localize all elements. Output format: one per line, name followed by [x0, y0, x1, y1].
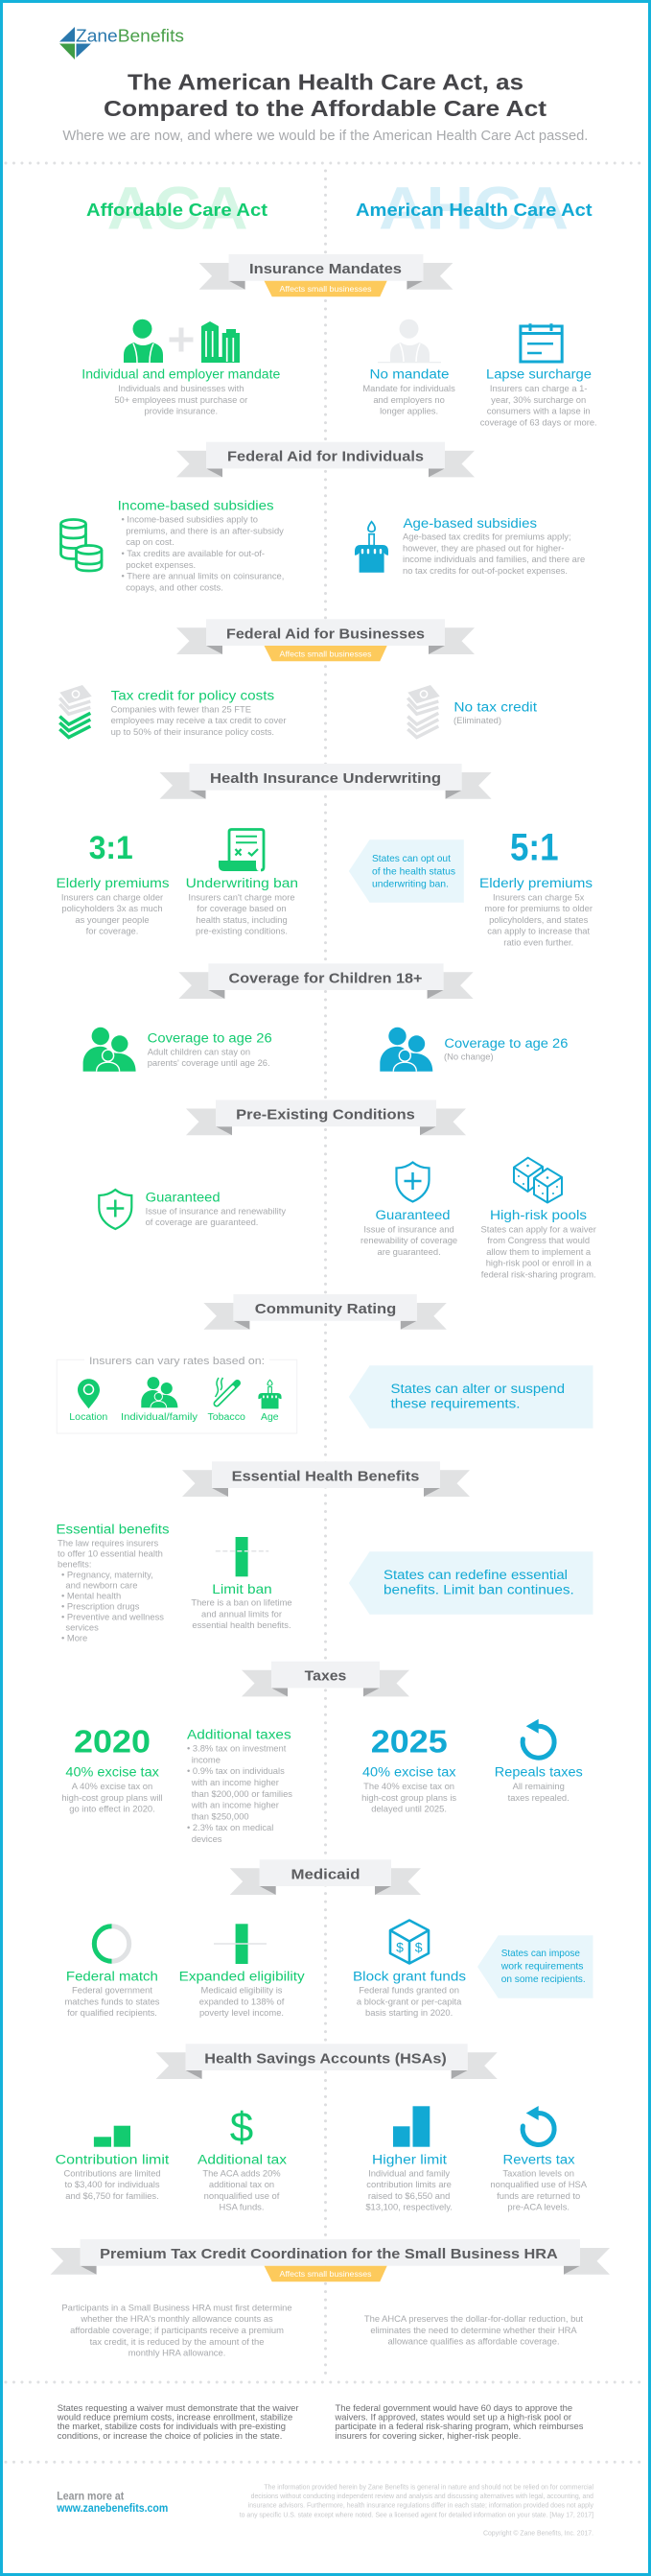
text: health status, including [196, 914, 288, 925]
text: States can apply for a waiver [481, 1223, 596, 1234]
panel: rate factors [57, 1355, 297, 1433]
disclaimer: to any specific U.S. state except where noted. See a licensed agent for detailed information on your state. [May 17, 2017] [240, 2512, 593, 2518]
title [104, 69, 546, 121]
text: than $200,000 or families [192, 1788, 292, 1799]
icon: buildings [201, 321, 240, 363]
heading: Limit ban [212, 1582, 272, 1596]
icon: small bars [94, 2126, 130, 2147]
heading: Underwriting ban [186, 876, 298, 890]
icon: shield [99, 1190, 131, 1229]
panel: essential benefits [56, 1522, 170, 1643]
heading: Expanded eligibility [179, 1969, 305, 1983]
panel: repeals taxes [495, 1719, 583, 1803]
heading: Elderly premiums [479, 876, 593, 890]
text: employees may receive a tax credit to cover [111, 715, 286, 725]
banner: Insurance Mandates: Affects small businesses [280, 284, 372, 294]
text: nonqualified use of [204, 2190, 280, 2201]
callout: work requirements: work requirements [500, 1961, 583, 1973]
icon: bar [214, 1924, 267, 1964]
text: Individual and family [368, 2167, 450, 2178]
icon: plus [169, 328, 194, 351]
big number: 3:1 [89, 830, 133, 866]
panel: ACA excise tax [61, 1725, 163, 1814]
text: pre-existing conditions. [196, 926, 288, 936]
text: waiver approval: insurers for covering sicker, higher-risk people. [336, 2430, 521, 2441]
heading: 40% excise tax [362, 1765, 456, 1780]
column header: Affordable Care Act: ACA [107, 176, 248, 243]
text: (No change) [444, 1051, 494, 1061]
text: ACA HRA: tax credit, it is reduced by the amount of the [90, 2336, 264, 2347]
icon: coins [61, 520, 102, 571]
panel: limit ban [191, 1537, 292, 1630]
callout: alter or suspend [349, 1365, 593, 1429]
text: • 3.8% tax on investment [187, 1743, 287, 1754]
heading: Tax credit for policy costs [111, 688, 274, 702]
text: services [65, 1622, 99, 1633]
text: Individuals and businesses with [118, 383, 244, 393]
text: The law requires insurers [58, 1537, 159, 1548]
text: allow them to implement a [486, 1246, 592, 1257]
icon: family [83, 1028, 136, 1072]
icon: tall bars [393, 2106, 430, 2147]
icon: money stack [59, 685, 92, 737]
text: Mandate for individuals [362, 383, 455, 393]
heading: Coverage to age 26 [148, 1031, 272, 1046]
text: • Tax credits are available for out-of- [121, 548, 265, 558]
text: waiver requirements: the market, stabilize costs for individuals with pre-existing [58, 2421, 286, 2431]
logo: ZaneBenefits [76, 27, 184, 46]
panel: expanded eligibility [179, 1924, 305, 2018]
label: Location [69, 1412, 107, 1423]
text: coverage of 63 days or more. [480, 416, 597, 427]
banner: Coverage for Children 18+ [178, 963, 474, 999]
column header: Affordable Care Act: Affordable Care Act [86, 200, 267, 220]
text: to $3,400 for individuals [64, 2179, 160, 2189]
text: delayed until 2025. [371, 1804, 447, 1814]
text: funds are returned to [497, 2190, 580, 2201]
banner: Premium Tax Credit Coordination: Affects small businesses [280, 2269, 372, 2279]
heading: Guaranteed [376, 1208, 451, 1222]
panel: AHCA no mandate [362, 319, 455, 416]
footer link: www.zanebenefits.com [56, 2503, 168, 2515]
logo [59, 27, 184, 59]
text: waiver approval: The federal government would have 60 days to approve the [336, 2402, 572, 2413]
text: contribution limits are [366, 2179, 452, 2189]
heading: Additional tax [198, 2152, 287, 2166]
panel: tax credit for policy costs [59, 685, 286, 737]
text: • 0.9% tax on individuals [187, 1765, 285, 1776]
text: Medicaid eligibility is [201, 1985, 283, 1996]
text: copays, and other costs. [126, 581, 223, 592]
banner: Health Insurance Underwriting [159, 764, 492, 799]
callout: opt out: underwriting ban. [372, 879, 449, 890]
text: of coverage are guaranteed. [146, 1217, 258, 1227]
heading: No mandate [370, 366, 449, 381]
panel: ACA coverage to 26 [83, 1028, 272, 1072]
text: (Eliminated) [453, 715, 501, 725]
text: provide insurance. [144, 406, 218, 416]
banner: Premium Tax Credit Coordination [51, 2239, 610, 2281]
banner: Medicaid [230, 1859, 421, 1895]
text: AHCA HRA: allowance qualifies as affordable coverage. [387, 2336, 560, 2347]
banner: Health Insurance Underwriting: Health Insurance Underwriting [210, 770, 441, 787]
banner: Insurance Mandates [199, 254, 453, 296]
text: however, they are phased out for higher- [403, 542, 564, 553]
icon: cake [355, 522, 388, 573]
text: for coverage based on [197, 903, 287, 913]
text: ACA HRA: monthly HRA allowance. [128, 2348, 225, 2358]
heading: Block grant funds [353, 1969, 466, 1983]
text: from Congress that would [487, 1235, 590, 1245]
text: • Preventive and wellness [61, 1612, 164, 1622]
panel: ACA elderly premiums [56, 830, 170, 936]
text: and annual limits for [201, 1608, 282, 1619]
label: Tobacco [207, 1412, 245, 1423]
big number: 2025 [371, 1725, 448, 1761]
text: Contributions are limited [63, 2167, 161, 2178]
banner: Pre-Existing Conditions [186, 1099, 466, 1135]
text: Age-based tax credits for premiums apply; [403, 532, 571, 542]
text: Adult children can stay on [148, 1046, 250, 1056]
text: 50+ employees must purchase or [114, 394, 247, 405]
disclaimer: insurance advisors. Furthermore, health insurance regulations differ in each state; information provided does not apply [248, 2503, 594, 2510]
icon: cake [258, 1380, 282, 1408]
text: are guaranteed. [377, 1246, 441, 1257]
text: ACA HRA: whether the HRA's monthly allowance counts as [80, 2313, 273, 2324]
text: devices [192, 1833, 222, 1844]
heading: Federal match [66, 1969, 158, 1983]
callout: alter or suspend: these requirements. [391, 1397, 520, 1411]
icon: scroll [219, 829, 264, 871]
heading: Guaranteed [146, 1191, 221, 1205]
heading: High-risk pools [490, 1208, 587, 1222]
text: with an income higher [191, 1800, 279, 1810]
icon: money box: $ [415, 1940, 423, 1955]
text: Insurers can't charge more [188, 891, 295, 902]
column header: American Health Care Act: American Health Care Act [356, 200, 593, 220]
text: waiver approval: waivers. If approved, states would set up a high-risk pool or [334, 2412, 571, 2422]
text: essential health benefits. [192, 1619, 291, 1630]
text: AHCA HRA: eliminates the need to determine whether their HRA [370, 2325, 577, 2335]
text: matches funds to states [64, 1996, 160, 2006]
text: and employers no [373, 394, 445, 405]
text: income individuals and families, and there are [403, 554, 585, 564]
heading: Essential benefits [56, 1522, 170, 1536]
callout: redefine benefits [349, 1551, 593, 1615]
text: for coverage. [86, 926, 138, 936]
banner: Coverage for Children 18+: Coverage for Children 18+ [228, 970, 423, 986]
banner: Health Savings Accounts (HSAs): Health Savings Accounts (HSAs) [204, 2050, 447, 2067]
text: nonqualified use of HSA [490, 2179, 588, 2189]
panel: AHCA guaranteed [360, 1163, 457, 1257]
text: ACA HRA: affordable coverage; if participants receive a premium [70, 2325, 284, 2335]
text: • There are annual limits on coinsurance, [121, 571, 284, 581]
heading: Higher limit [372, 2152, 447, 2166]
text: high-cost group plans will [61, 1792, 163, 1803]
icon: shield [397, 1163, 430, 1201]
callout: alter or suspend: States can alter or suspend [391, 1382, 565, 1396]
banner: Taxes [242, 1662, 409, 1696]
text: raised to $6,550 and [368, 2190, 450, 2201]
text: pocket expenses. [126, 559, 196, 570]
heading: Additional taxes [187, 1727, 291, 1741]
icon: bar with limit line [216, 1537, 268, 1576]
text: taxes repealed. [508, 1792, 570, 1803]
text: • Pregnancy, maternity, [61, 1570, 153, 1580]
text: Insurers can charge older [61, 891, 163, 902]
banner: Community Rating [203, 1294, 447, 1330]
panel: AHCA lapse surcharge [480, 323, 597, 427]
banner: Health Savings Accounts (HSAs) [156, 2044, 498, 2079]
text: cap on cost. [126, 536, 174, 547]
text: than $250,000 [192, 1810, 249, 1821]
icon: family [141, 1377, 177, 1407]
heading: No tax credit [453, 700, 537, 715]
title: Compared to the Affordable Care Act [104, 96, 546, 121]
banner: Essential Health Benefits: Essential Health Benefits [232, 1468, 419, 1484]
banner: Federal Aid for Individuals: Federal Aid for Individuals [227, 449, 424, 465]
text: parents' coverage until age 26. [148, 1057, 270, 1068]
text: The ACA adds 20% [202, 2167, 281, 2178]
text: premiums, and there is an after-subsidy [126, 525, 284, 535]
text: • Prescription drugs [61, 1601, 140, 1612]
icon: money box [390, 1921, 429, 1963]
column header: American Health Care Act: AHCA [379, 176, 569, 243]
text: A 40% excise tax on [72, 1781, 152, 1791]
text: high-risk pool or enroll in a [486, 1258, 592, 1268]
text: policyholders, and states [489, 914, 589, 925]
text: The 40% excise tax on [363, 1781, 454, 1791]
heading: Lapse surcharge [486, 366, 592, 381]
icon: gray person [378, 319, 441, 363]
icon: repeat arrow [523, 1719, 554, 1758]
panel: additional tax [198, 2104, 287, 2212]
text: waiver requirements: conditions, or increase the choice of policies in the state. [58, 2430, 282, 2441]
panel: AHCA coverage to 26 [380, 1028, 568, 1072]
text: up to 50% of their insurance policy costs. [111, 726, 274, 737]
panel: AHCA excise tax [361, 1725, 456, 1814]
text: benefits: [58, 1558, 91, 1569]
heading: Contribution limit [56, 2152, 170, 2166]
banner: Medicaid: Medicaid [291, 1866, 360, 1882]
callout: redefine benefits: States can redefine essential [384, 1568, 568, 1582]
panel: no tax credit [407, 685, 537, 737]
text: go into effect in 2020. [69, 1804, 155, 1814]
text: Federal government [72, 1985, 152, 1996]
big number: 5:1 [510, 827, 558, 869]
callout: opt out: States can opt out [372, 853, 451, 864]
text: expanded to 138% of [199, 1996, 285, 2006]
banner: Community Rating: Community Rating [255, 1301, 396, 1317]
icon: dollar: $ [230, 2104, 253, 2151]
icon: donut [94, 1926, 129, 1961]
text: ratio even further. [503, 936, 573, 948]
text: can apply to increase that [487, 926, 591, 936]
panel: additional taxes [187, 1727, 292, 1844]
text: consumers with a lapse in [487, 406, 591, 416]
text: Issue of insurance and renewability [146, 1205, 286, 1216]
label: Age [261, 1412, 279, 1423]
heading: Reverts tax [502, 2152, 575, 2166]
banner: Essential Health Benefits [182, 1461, 470, 1497]
heading: Elderly premiums [56, 876, 170, 890]
text: waiver requirements: would reduce premium costs, increase enrollment, stabilize [57, 2412, 292, 2422]
banner: Taxes: Taxes [305, 1668, 346, 1685]
panel: ACA mandate [81, 319, 280, 416]
heading: Income-based subsidies [118, 499, 274, 513]
banner: Insurance Mandates: Insurance Mandates [249, 261, 402, 277]
text: Companies with fewer than 25 FTE [111, 703, 251, 714]
text: $13,100, respectively. [365, 2202, 453, 2212]
text: poverty level income. [199, 2007, 284, 2018]
callout: opt out: of the health status [372, 865, 455, 877]
panel: federal match [64, 1926, 160, 2018]
banner: Federal Aid for Individuals [176, 442, 475, 477]
text: a block-grant or per-capita [357, 1996, 462, 2006]
text: as younger people [75, 914, 150, 925]
text: income [192, 1754, 221, 1764]
banner: Premium Tax Credit Coordination: Premium Tax Credit Coordination for the Small Business HRA [100, 2246, 558, 2262]
text: and $6,750 for families. [65, 2190, 159, 2201]
heading: Age-based subsidies [403, 516, 537, 531]
footer link [56, 2491, 168, 2515]
disclaimer: Copyright © Zane Benefits, Inc. 2017. [483, 2529, 593, 2537]
text: waiver approval: participate in a federal risk-sharing program, which reimburses [336, 2421, 584, 2431]
title: The American Health Care Act, as [128, 69, 523, 94]
panel: income-based subsidies [61, 499, 284, 592]
text: ACA HRA: Participants in a Small Business HRA must first determine [61, 2302, 292, 2312]
icon: repeat arrow [523, 2106, 554, 2144]
heading: Coverage to age 26 [444, 1036, 568, 1051]
icon: family [380, 1028, 432, 1072]
text: year, 30% surcharge on [491, 394, 586, 405]
panel: higher limit [365, 2106, 453, 2212]
banner: Federal Aid for Businesses: Affects small businesses [280, 649, 372, 658]
panel: high-risk pools [481, 1158, 596, 1280]
text: Insurers can charge 5x [493, 891, 585, 902]
icon: dice [514, 1158, 562, 1203]
text: • Income-based subsidies apply to [121, 514, 258, 525]
text: Taxation levels on [502, 2167, 574, 2178]
panel: ACA guaranteed [99, 1190, 286, 1229]
text: Insurers can charge a 1- [490, 383, 588, 393]
text: There is a ban on lifetime [191, 1597, 292, 1608]
text: additional tax on [209, 2179, 274, 2189]
text: no tax credits for out-of-pocket expenses. [403, 565, 568, 576]
callout: redefine benefits: benefits. Limit ban continues. [384, 1583, 574, 1597]
text: for qualified recipients. [67, 2007, 157, 2018]
text: basis starting in 2020. [365, 2007, 453, 2018]
panel: reverts tax [490, 2106, 588, 2212]
heading: Repeals taxes [495, 1765, 583, 1780]
text: • 2.3% tax on medical [187, 1822, 273, 1832]
footer link: Learn more at [57, 2491, 124, 2502]
subtitle: Where we are now, and where we would be if the American Health Care Act passed. [62, 128, 588, 144]
panel: block grant funds [353, 1921, 466, 2018]
text: pre-ACA levels. [507, 2202, 570, 2212]
panel: contribution limit [56, 2126, 170, 2201]
text: • Mental health [61, 1591, 121, 1601]
panel: underwriting ban [186, 829, 298, 936]
disclaimer: decisions without conducting independent review and analysis and discussing alternatives with legal, accounting, and [251, 2493, 593, 2500]
text: and newborn care [65, 1580, 137, 1591]
panel: age-based subsidies [355, 516, 585, 576]
banner: Pre-Existing Conditions: Pre-Existing Conditions [236, 1107, 415, 1123]
panel: AHCA elderly premiums [479, 827, 593, 948]
callout: work requirements: on some recipients. [501, 1973, 586, 1985]
callout: work requirements: States can impose [501, 1948, 580, 1959]
disclaimer: The information provided herein by Zane Benefits is general in nature and should not be relied on for commercial [264, 2485, 593, 2491]
heading: 40% excise tax [65, 1765, 159, 1780]
callout: work requirements [477, 1935, 593, 1998]
icon: location pin [78, 1379, 100, 1408]
text: policyholders 3x as much [61, 903, 163, 913]
text: • More [61, 1633, 87, 1643]
text: federal risk-sharing program. [481, 1268, 596, 1280]
banner: Federal Aid for Businesses [176, 619, 475, 661]
text: with an income higher [191, 1777, 279, 1787]
text: renewability of coverage [360, 1235, 457, 1245]
icon: person [124, 319, 163, 363]
text: waiver requirements: States requesting a waiver must demonstrate that the waiver [58, 2402, 299, 2413]
text: longer applies. [380, 406, 438, 416]
text: to offer 10 essential health [58, 1548, 163, 1558]
icon: gray money stack [407, 685, 440, 737]
text: All remaining [513, 1781, 565, 1791]
callout: opt out [349, 839, 464, 903]
icon: calendar [521, 323, 562, 362]
text: HSA funds. [220, 2202, 264, 2212]
text: AHCA HRA: The AHCA preserves the dollar-for-dollar reduction, but [364, 2313, 584, 2324]
text: Federal funds granted on [359, 1985, 459, 1996]
banner: Federal Aid for Businesses: Federal Aid for Businesses [226, 626, 425, 642]
box heading: Insurers can vary rates based on: [89, 1356, 265, 1367]
heading: Individual and employer mandate [81, 366, 280, 381]
text: Issue of insurance and [363, 1223, 454, 1234]
label: Individual/family [121, 1412, 198, 1423]
icon: money box: $ [396, 1940, 404, 1955]
big number: 2020 [74, 1725, 151, 1761]
icon: tobacco [215, 1378, 238, 1404]
text: more for premiums to older [484, 903, 593, 913]
text: high-cost group plans is [361, 1792, 456, 1803]
